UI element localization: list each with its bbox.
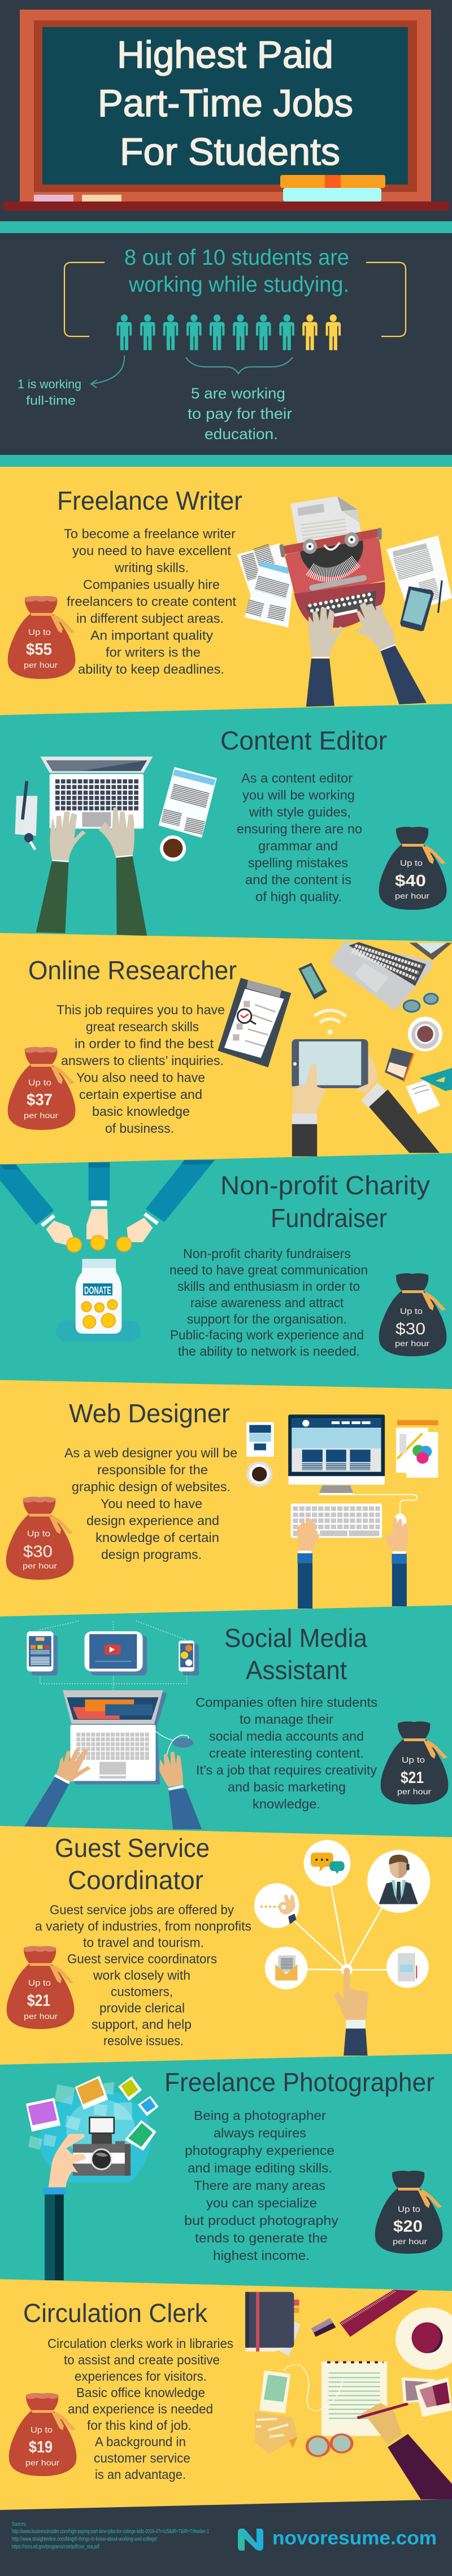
illustration: donation jar and hands: DONATE (84, 1285, 111, 1296)
body text (184, 2108, 338, 2263)
notepad (321, 2362, 387, 2436)
body text: spelling mistakes (248, 856, 348, 870)
money bag: $21: $21 (27, 1992, 50, 2010)
body text: Companies often hire students (195, 1695, 377, 1710)
money bag: $19 (9, 2393, 76, 2476)
body text: As a web designer you will be (64, 1445, 237, 1460)
left papers (237, 544, 291, 604)
heading: Freelance Writer (57, 486, 242, 515)
body text: the ability to network is needed. (178, 1344, 360, 1359)
money bag: $30: Up to (400, 1307, 423, 1316)
mouse (155, 1731, 189, 1756)
body text: is an advantage. (95, 2467, 186, 2482)
envelope (255, 2411, 298, 2454)
title: For Students (120, 130, 340, 173)
body text: knowledge. (253, 1797, 320, 1811)
body text (64, 526, 236, 676)
illustration: library desk (245, 2290, 452, 2499)
notebook (385, 1048, 414, 1081)
body text: and experience is needed (68, 2402, 213, 2416)
body text (169, 1246, 368, 1359)
label: 5 are working: 5 are working (191, 385, 285, 402)
heading: Fundraiser (271, 1203, 387, 1233)
body text: resolve issues. (103, 2033, 184, 2048)
laptop (332, 941, 432, 1010)
chat phone device (183, 1644, 199, 1675)
money bag: $21 (381, 1721, 448, 1804)
money bag: $40: Up to (400, 858, 423, 868)
sources: Sources: (12, 2521, 27, 2527)
glasses (403, 994, 438, 1012)
clipboard (218, 978, 291, 1067)
money bag: $30 (6, 1497, 73, 1580)
body text: social media accounts and (209, 1729, 364, 1743)
body text: always requires (214, 2126, 306, 2140)
title: Part-Time Jobs (98, 82, 353, 125)
headset agent (379, 1880, 418, 1904)
label: 1 is working full-time: full-time (26, 393, 76, 408)
body text: to assist and create positive (64, 2352, 220, 2367)
coffee (246, 1461, 272, 1487)
illustration: camera and photos (26, 2076, 159, 2280)
hands (297, 1518, 320, 1550)
glasses (307, 2437, 329, 2456)
heading: Online Researcher (28, 956, 237, 985)
statistic heading (124, 246, 349, 297)
body text: skills and enthusiasm in order to (177, 1279, 360, 1294)
body text: provide clerical (99, 2000, 185, 2015)
statistic heading: working while studying. (128, 273, 349, 297)
body text: and the content is (245, 873, 351, 887)
body text: photography experience (185, 2143, 334, 2158)
typewriter body (281, 529, 380, 554)
keyboard (291, 1504, 382, 1538)
money bag: $21 (7, 1946, 74, 2029)
heading: Circulation Clerk (23, 2298, 208, 2328)
label: 1 is working full-time: 1 is working (18, 377, 81, 391)
sources: http://www.straighterline.com/blog/6-things-to-know-about-working-and-college/ (12, 2535, 157, 2542)
panel: circulation clerk (0, 2279, 452, 2514)
body text: Guest service jobs are offered by (50, 1902, 234, 1917)
money bag: $30: per hour (395, 1339, 430, 1348)
body text: you need to have excellent (72, 543, 231, 558)
body text: As a content editor (241, 771, 353, 786)
note and set square (406, 1080, 440, 1114)
body text: experiences for visitors. (75, 2369, 207, 2384)
money bag: $55: Up to (28, 628, 51, 637)
illustration: devices and laptop (24, 1621, 202, 1829)
writing hand (360, 2403, 402, 2444)
body text: tends to generate the (195, 2231, 328, 2245)
money bag: $37: per hour (24, 1111, 59, 1120)
body text: basic knowledge (92, 1104, 190, 1119)
coins (67, 1236, 131, 1252)
body text: Non-profit charity fundraisers (183, 1246, 351, 1261)
sleeves (0, 1164, 54, 1225)
panel: content editor (0, 704, 452, 948)
illustration: donation jar and hands (0, 1160, 215, 1342)
money bag: $19: per hour (25, 2459, 60, 2467)
jar (56, 1321, 141, 1342)
heading: Content Editor (220, 726, 387, 755)
illustration: typewriter and hands (237, 496, 452, 707)
illustration: research desk (218, 941, 452, 1156)
body text: a variety of industries, from nonprofits (35, 1919, 251, 1934)
money bag: $21: $21 (401, 1769, 424, 1787)
body text: you will be working (242, 788, 355, 803)
illustration: laptop, papers and coffee (15, 757, 217, 936)
money bag: $37: Up to (28, 1078, 51, 1088)
heading: Guest Service (55, 1833, 210, 1863)
space bar (312, 578, 364, 588)
coffee cup (160, 835, 186, 861)
money bag: $40 (379, 827, 446, 910)
cuffs (42, 1216, 54, 1225)
body text: design experience and (86, 1513, 219, 1528)
money bag: $21: Up to (28, 1978, 51, 1988)
body text: for writers is the (106, 645, 201, 659)
money bag: $55: $55 (26, 641, 52, 659)
money bag: $55 (8, 596, 75, 679)
body text: customers, (111, 1984, 173, 1999)
money bag: $20: per hour (393, 2237, 428, 2246)
mouse (394, 1513, 406, 1530)
panel: student statistic (0, 221, 452, 467)
footer panel (0, 2499, 452, 2576)
tablet device (91, 1636, 147, 1675)
body text: You need to have (101, 1496, 202, 1511)
body text: A background in (95, 2434, 186, 2449)
heading (224, 1623, 367, 1685)
laptop (69, 1693, 167, 1784)
body text: with style guides, (249, 805, 351, 820)
body text: Being a photographer (194, 2108, 326, 2123)
money bag: $21: Up to (402, 1755, 425, 1765)
money bag: $30: Up to (27, 1529, 50, 1539)
body text: work closely with (93, 1968, 190, 1982)
panel: online researcher (0, 933, 452, 1168)
body text: writing skills. (114, 560, 189, 575)
keys (306, 591, 376, 619)
people icons (117, 314, 341, 350)
money bag: $40: per hour (395, 892, 430, 900)
heading: Assistant (246, 1655, 347, 1685)
money bag: $20: $20 (393, 2218, 423, 2236)
body text: of business. (105, 1121, 174, 1136)
body text: Basic office knowledge (76, 2385, 205, 2400)
body text: great research skills (86, 1019, 199, 1034)
body text: An important quality (90, 628, 213, 642)
coffee (408, 1017, 442, 1052)
body text: to manage their (240, 1712, 333, 1727)
heading: Social Media (224, 1623, 367, 1653)
money bag: $55: per hour (24, 661, 58, 669)
music player (259, 2371, 290, 2413)
camera (92, 2134, 112, 2144)
body text: answers to clients’ inquiries. (61, 1053, 224, 1068)
envelope (278, 1955, 295, 1972)
label: 5 are working (188, 385, 292, 443)
panel: guest service coordinator (0, 1826, 452, 2069)
brace under five people (186, 357, 293, 374)
body text: and image editing skills. (188, 2161, 332, 2175)
dotted connectors (40, 1621, 187, 1690)
body text (47, 2336, 233, 2482)
money bag: $20: Up to (398, 2205, 420, 2214)
money bag: $30 (379, 1273, 446, 1356)
hands and sleeves (55, 1749, 91, 1783)
body text: but product photography (184, 2213, 338, 2228)
money bag: $37: $37 (27, 1091, 53, 1109)
hand and sleeve (49, 2134, 86, 2187)
typewriter wheel (300, 541, 363, 577)
money bag: $30: per hour (23, 1562, 58, 1570)
usb stick (311, 2318, 336, 2337)
body text: Guest service coordinators (67, 1952, 217, 1966)
chat bubbles (311, 1852, 333, 1872)
monitor (288, 1414, 385, 1485)
body text: graphic design of websites. (72, 1479, 231, 1494)
hands (309, 608, 343, 657)
book (274, 2322, 301, 2356)
tablet and hands (292, 1039, 368, 1088)
body text: You also need to have (76, 1070, 205, 1085)
body text: This job requires you to have (56, 1002, 225, 1017)
typing hands (50, 812, 85, 861)
title (98, 33, 353, 173)
arrow to full-time label (91, 356, 124, 388)
envelope and pencil (15, 796, 37, 836)
title: Highest Paid (117, 33, 333, 76)
body text: highest income. (213, 2248, 310, 2263)
newspaper (398, 1953, 415, 1981)
label: 1 is working full-time (18, 377, 81, 408)
body text: It’s a job that requires creativity (196, 1763, 377, 1777)
panel: freelance writer (0, 467, 452, 722)
body text: for this kind of job. (87, 2418, 192, 2433)
art sheet and colours (396, 1428, 438, 1478)
money bag: $21: per hour (397, 1788, 432, 1796)
money bag: $37 (8, 1047, 75, 1130)
tablet (246, 1422, 274, 1457)
body text: grammar and (258, 839, 338, 853)
label: 5 are working: to pay for their (188, 405, 292, 422)
body text: customer service (94, 2451, 190, 2465)
heading (55, 1833, 210, 1895)
panel: web designer (0, 1380, 452, 1620)
body text: Public-facing work experience and (170, 1328, 364, 1342)
body text (35, 1902, 251, 2048)
wifi icon (314, 1010, 346, 1023)
body text: design programs. (101, 1547, 202, 1562)
body text: ability to keep deadlines. (78, 661, 224, 676)
heading: Freelance Photographer (164, 2067, 434, 2097)
papers (159, 767, 217, 838)
yellow brackets (64, 262, 406, 336)
heading: Non-profit Charity (220, 1171, 430, 1200)
ruler (340, 2290, 419, 2337)
heading: Web Designer (69, 1399, 230, 1428)
body text: support for the organisation. (187, 1312, 347, 1326)
illustration: design desktop (246, 1414, 438, 1609)
body text: Companies usually hire (83, 577, 220, 592)
panel: non-profit charity fundraiser (0, 1153, 452, 1394)
body text: to travel and tourism. (83, 1935, 204, 1949)
money bag: $30: $30 (395, 1320, 425, 1338)
body text: of high quality. (255, 890, 342, 904)
sources (12, 2521, 209, 2550)
pointing hand (334, 1968, 368, 2020)
body text: support, and help (92, 2017, 192, 2032)
body text (56, 1002, 225, 1136)
paper in typewriter (290, 496, 363, 557)
panel: freelance photographer (0, 2054, 452, 2292)
phone and pencil (400, 586, 434, 631)
statistic heading: 8 out of 10 students are (124, 246, 349, 270)
body text: in different subject areas. (76, 611, 224, 625)
body text: freelancers to create content (67, 594, 236, 608)
body text: you can specialize (206, 2196, 317, 2210)
sources: http://www.businessinsider.com/high-paying-part-time-jobs-for-college-kids-2016-4?r=US&IR=T&IR=T/#writer-1 (12, 2528, 209, 2535)
money bag: $21: per hour (24, 2012, 58, 2021)
money bag: $19: Up to (31, 2425, 53, 2435)
body text (195, 1695, 377, 1811)
money bag: $20 (375, 2171, 442, 2254)
heading: Coordinator (68, 1865, 203, 1895)
body text: To become a freelance writer (64, 526, 236, 541)
phone (298, 963, 327, 1000)
body text: in order to find the best (75, 1036, 214, 1051)
coffee cup (395, 2307, 452, 2370)
body text: There are many areas (194, 2178, 325, 2193)
logo: novoresume.com (272, 2527, 437, 2549)
money bag: $30: $30 (23, 1543, 53, 1561)
body text: certain expertise and (79, 1087, 202, 1102)
body text: ensuring there are no (237, 822, 362, 836)
body text: and basic marketing (228, 1780, 346, 1794)
label: 5 are working: education. (205, 426, 278, 443)
heading (220, 1171, 430, 1233)
header: chalkboard (3, 10, 449, 211)
body text: responsible for the (97, 1462, 208, 1477)
money bag: $19: $19 (29, 2438, 53, 2456)
stars and ok hand: ★★★★★ (259, 1904, 281, 1909)
photos (402, 2377, 435, 2403)
phone device (32, 1636, 58, 1675)
money bag: $40: $40 (395, 872, 426, 890)
body text: Circulation clerks work in libraries (47, 2336, 233, 2351)
body text: need to have great communication (169, 1263, 368, 1277)
body text: raise awareness and attract (190, 1295, 344, 1310)
right paper (386, 536, 452, 613)
body text (237, 771, 362, 904)
body text (64, 1445, 237, 1562)
panel: social media assistant (0, 1605, 452, 1840)
hands (46, 1221, 73, 1245)
sources: https://nces.ed.gov/programs/coe/pdf/coe_ssa.pdf (12, 2543, 99, 2550)
body text: create interesting content. (209, 1746, 364, 1760)
body text: knowledge of certain (95, 1530, 219, 1545)
illustration: service network (254, 1840, 430, 2056)
